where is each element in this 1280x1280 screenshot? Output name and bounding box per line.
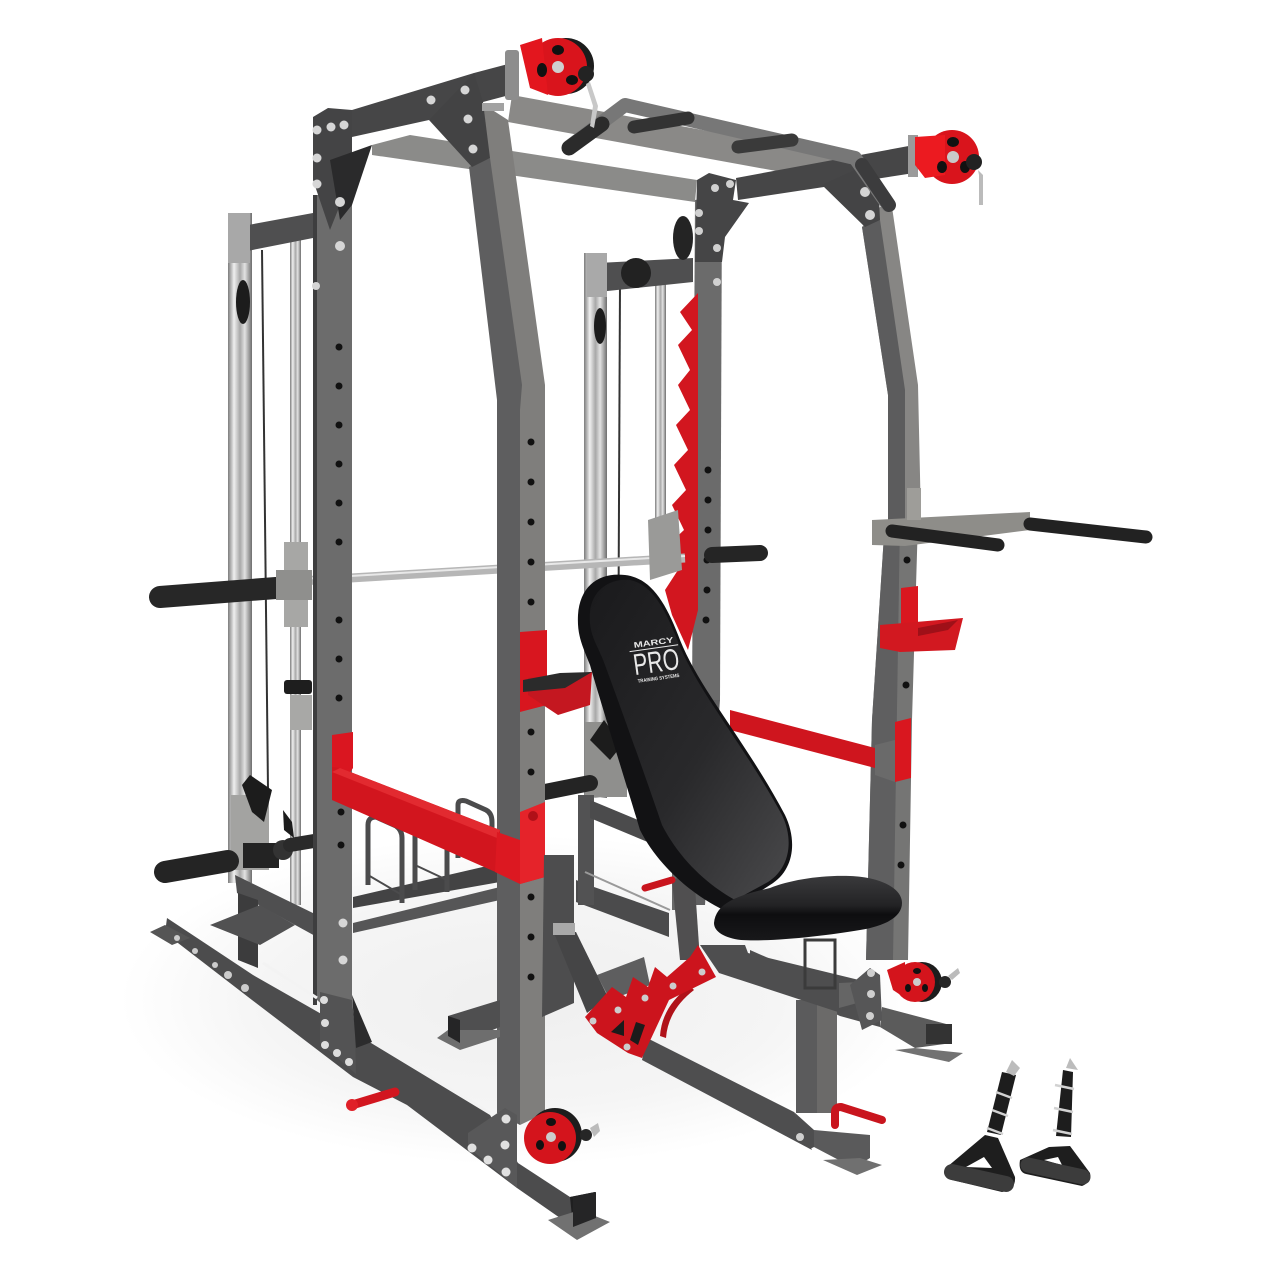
lower weight sleeves [165,783,590,872]
top left pulley [520,38,598,128]
left frame rear post [312,108,372,1030]
bench side rail [672,872,882,1030]
chin-up bar [569,105,889,205]
overhead top crossbar [508,95,855,185]
floor shadow [120,835,920,1165]
bottom pulley left [524,1108,600,1164]
base corner plate, rear [320,992,372,1074]
red bench lock pin [645,880,882,1125]
bench logo: MARCY [633,635,675,650]
front left post [469,104,545,1125]
red peg on left rail [346,1092,395,1111]
red left crossbar [332,732,545,884]
red angle bracket [585,945,716,1058]
top right pulley [908,130,983,205]
rear right base frame [576,795,963,1062]
bench logo [628,635,683,685]
cable handle right [1020,1058,1090,1186]
smith machine bar [160,510,760,600]
right frame rear post [672,173,749,910]
bench logo: PRO [631,643,681,682]
rear plate storage rack [210,800,500,968]
red left hook bracket [520,630,592,715]
left cable tower [228,213,313,905]
red rear bench crossbar [730,710,911,782]
right cable tower [584,216,693,798]
red right hook bracket [880,586,963,652]
left top beam and gusset [352,50,519,167]
right top beam and gusset [736,145,921,960]
red safety catch strip [665,293,698,650]
bench logo: TRAINING SYSTEMS [637,673,680,685]
cable handle left [947,1060,1020,1192]
left base rail [150,918,610,1240]
dip bars [872,488,1146,546]
bench base rail [642,1000,882,1175]
bench rear upright [437,855,650,1050]
base corner plate, front [468,1108,517,1188]
bottom pulley right [887,962,960,1002]
bench seat pad [714,876,902,940]
bench backrest pad [578,575,792,912]
back top crossbar [372,135,697,202]
